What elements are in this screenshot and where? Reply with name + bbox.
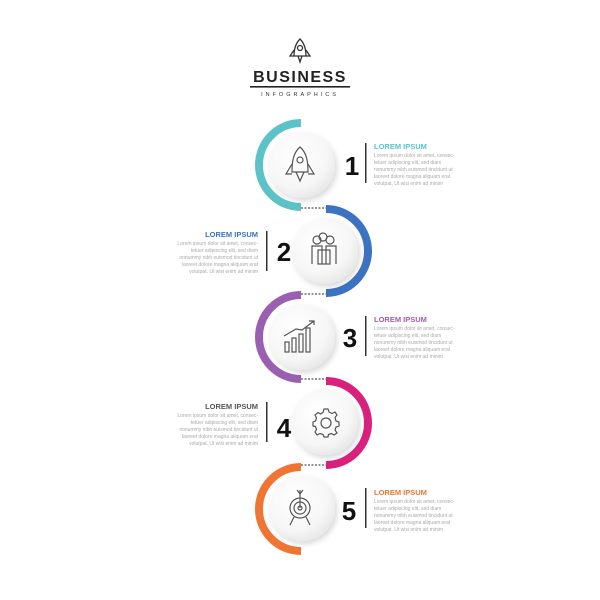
step 1 [259,123,455,207]
text 4: Lorem ipsum dolor sit amet, consec- [177,413,258,419]
text 3: tetuer adipiscing elit, sed diam [374,333,441,339]
connectors dashed [301,208,326,465]
text 1: laoreet dolore magna aliquam erat [374,174,451,180]
text 4 [177,402,259,447]
number 3: 3 [343,323,357,353]
arc: blue [326,209,368,293]
text 5: laoreet dolore magna aliquam erat [374,520,451,526]
number 4: 4 [277,413,292,443]
number 2: 2 [277,237,291,267]
text 4: nonummy nibh euismod tincidunt ut [179,427,259,433]
text 1: LOREM IPSUM [374,142,427,151]
arc: pink [326,381,368,465]
text 3 [374,315,455,360]
text 1: Lorem ipsum dolor sit amet, consec- [374,153,455,159]
text 5 [374,488,455,533]
text 3: laoreet dolore magna aliquam erat [374,347,451,353]
text 4: volutpat. Ut wisi enim ad minim [189,441,258,447]
title: INFOGRAPHICS [261,92,339,98]
arc: teal [259,123,301,207]
text 2 [177,230,259,275]
icon: chart [284,321,314,352]
text 5: nonummy nibh euismod tincidunt ut [374,513,453,519]
text 3: LOREM IPSUM [374,315,427,324]
text 2: laoreet dolore magna aliquam erat [182,262,259,268]
icon: target [290,490,310,525]
text 2: LOREM IPSUM [205,230,258,239]
arc: purple [259,295,301,379]
number 1: 1 [345,151,359,181]
step 2 [177,209,368,293]
text 2: Lorem ipsum dolor sit amet, consec- [177,241,258,247]
text 1: volutpat. Ut wisi enim ad minim [374,181,443,187]
text 4: laoreet dolore magna aliquam erat [182,434,259,440]
title: BUSINESS [253,69,347,86]
text 5: LOREM IPSUM [374,488,427,497]
step 5 [259,467,455,551]
icon: rocket [286,147,314,181]
text 5: volutpat. Ut wisi enim ad minim [374,527,443,533]
text 1: tetuer adipiscing elit, sed diam [374,160,441,166]
text 5: Lorem ipsum dolor sit amet, consec- [374,499,455,505]
icon: team [312,233,336,264]
text 1 [374,142,455,187]
step 3 [259,295,455,379]
step 4 [177,381,368,465]
text 3: Lorem ipsum dolor sit amet, consec- [374,326,455,332]
icon: gear [313,409,339,437]
text 1: nonummy nibh euismod tincidunt ut [374,167,453,173]
text 2: volutpat. Ut wisi enim ad minim [189,269,258,275]
text 2: tetuer adipiscing elit, sed diam [191,248,258,254]
arc: orange [259,467,301,551]
text 5: tetuer adipiscing elit, sed diam [374,506,441,512]
text 4: LOREM IPSUM [205,402,258,411]
text 3: nonummy nibh euismod tincidunt ut [374,340,453,346]
title [250,39,350,98]
text 2: nonummy nibh euismod tincidunt ut [179,255,259,261]
text 4: tetuer adipiscing elit, sed diam [191,420,258,426]
circle 1 [269,132,335,198]
icon: header rocket [290,39,310,62]
number 5: 5 [342,496,356,526]
text 3: volutpat. Ut wisi enim ad minim [374,354,443,360]
